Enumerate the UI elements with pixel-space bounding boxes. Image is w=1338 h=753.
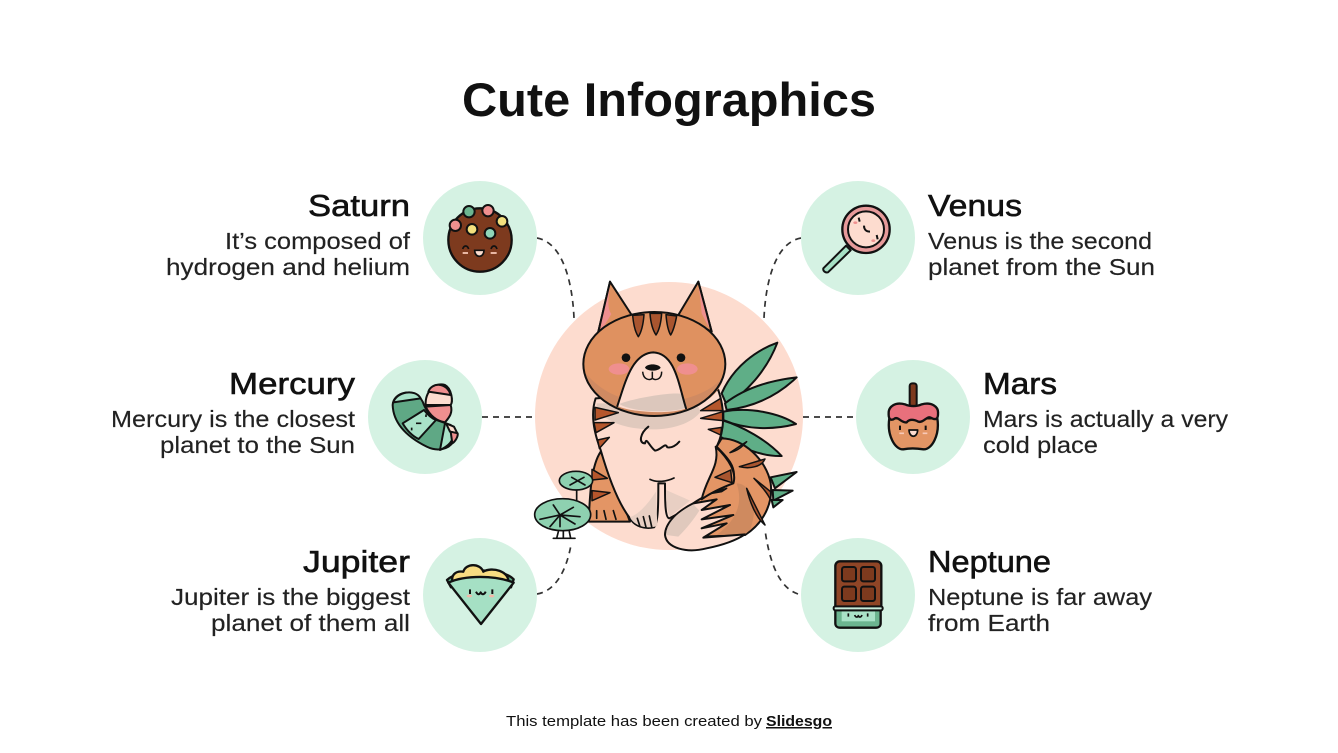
Mercury description: planet to the Sun — [160, 432, 355, 458]
Neptune heading: Neptune — [928, 544, 1051, 579]
Jupiter description: Jupiter is the biggest — [171, 584, 411, 610]
Neptune icon circle — [801, 538, 915, 652]
connector: Mercury — [482, 416, 535, 418]
icon: chocolate bar — [834, 561, 883, 628]
connector: Venus — [764, 238, 801, 318]
Mars icon circle — [856, 360, 970, 474]
Mars description — [983, 406, 1228, 458]
step: Neptune — [801, 538, 1152, 652]
leg and chest shading — [630, 490, 690, 527]
Venus description — [928, 228, 1155, 280]
Venus description: planet from the Sun — [928, 254, 1155, 280]
step: Mercury — [111, 360, 482, 474]
head stripes — [633, 313, 677, 337]
footer credit: Slidesgo — [766, 713, 832, 730]
Neptune description — [928, 584, 1152, 636]
icon: chocolate cookie — [448, 205, 512, 272]
Saturn description — [166, 228, 411, 280]
head outline — [583, 312, 725, 416]
connector: Saturn — [537, 238, 574, 318]
step: Jupiter — [171, 538, 537, 652]
Saturn description: It’s composed of — [225, 228, 411, 254]
Venus heading: Venus — [928, 188, 1022, 223]
Saturn description: hydrogen and helium — [166, 254, 410, 280]
step: Saturn — [166, 181, 537, 295]
Jupiter heading: Jupiter — [303, 544, 410, 579]
Mercury heading: Mercury — [229, 366, 356, 401]
title: Cute Infographics — [462, 73, 876, 126]
Venus description: Venus is the second — [928, 228, 1152, 254]
Saturn icon circle — [423, 181, 537, 295]
Jupiter icon circle — [423, 538, 537, 652]
head lower shading — [586, 373, 723, 415]
icon: crepe — [447, 565, 514, 624]
icon: magnifying lollipop — [823, 206, 890, 272]
Mercury description: Mercury is the closest — [111, 406, 356, 432]
Mercury description — [111, 406, 356, 458]
muzzle — [617, 352, 686, 412]
Venus icon circle — [801, 181, 915, 295]
Neptune description: Neptune is far away — [928, 584, 1152, 610]
Mars description: Mars is actually a very — [983, 406, 1228, 432]
connector: Mars — [803, 416, 856, 418]
Mars heading: Mars — [983, 366, 1057, 401]
lily pads — [535, 471, 593, 538]
head — [583, 312, 725, 416]
footer credit: This template has been created by — [506, 713, 763, 730]
body — [593, 390, 723, 528]
muzzle shadow — [619, 394, 685, 411]
Saturn heading: Saturn — [308, 188, 410, 223]
hind leg stripes — [712, 470, 732, 493]
connector: Neptune — [765, 530, 798, 594]
icon: striped candy — [393, 384, 458, 450]
face — [609, 353, 698, 379]
icon: candy apple — [889, 383, 938, 449]
back leaves — [720, 343, 797, 507]
connector: Jupiter — [537, 545, 571, 594]
central peach circle — [535, 282, 803, 550]
step: Mars — [856, 360, 1228, 474]
Neptune description: from Earth — [928, 610, 1050, 636]
step: Venus — [801, 181, 1155, 295]
Mars description: cold place — [983, 432, 1098, 458]
tail — [665, 438, 771, 550]
Jupiter description: planet of them all — [211, 610, 410, 636]
Mercury icon circle — [368, 360, 482, 474]
muzzle outline — [617, 352, 686, 408]
body stripes — [592, 398, 723, 501]
Jupiter description — [171, 584, 411, 636]
cat illustration — [535, 282, 797, 550]
chest fluff — [641, 427, 679, 451]
hind leg right — [702, 447, 734, 499]
hind leg left — [589, 452, 630, 522]
legs crease and toes — [597, 478, 674, 527]
ears — [598, 282, 712, 332]
